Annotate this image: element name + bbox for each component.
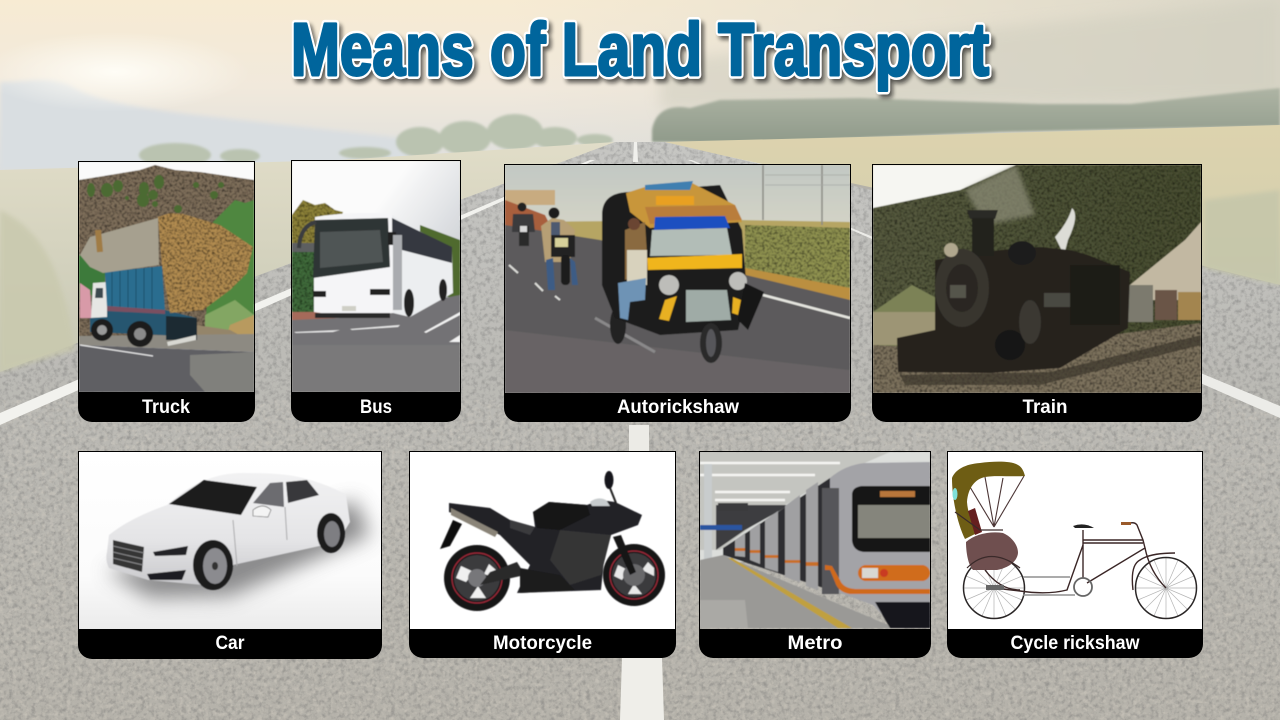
card outline: [410, 452, 676, 630]
label bar: Train: [872, 393, 1202, 422]
panel: truck: [78, 162, 255, 422]
label bar: Car: [78, 629, 382, 659]
label bar: Truck: Truck: [142, 397, 190, 418]
photo: white coach bus: [292, 161, 460, 392]
title: Means of Land Transport: [291, 8, 989, 91]
label bar: Car: Car: [216, 633, 245, 654]
label bar: Train: Train: [1022, 397, 1068, 418]
panel: car: [78, 452, 382, 659]
card outline: [78, 452, 382, 630]
title: Means of Land Transport: [294, 12, 992, 95]
photo: steam locomotive: [873, 165, 1201, 393]
sub-icon: motorcyclists: [512, 202, 578, 290]
label bar: Autorickshaw: [504, 393, 851, 422]
label bar: Metro: [699, 629, 931, 658]
label bar: Metro: Metro: [788, 633, 842, 654]
card outline: [872, 164, 1202, 394]
photo: truck loaded with hay: [79, 162, 254, 392]
panel: bus: [291, 160, 461, 422]
label bar: Motorcycle: Motorcycle: [493, 633, 592, 654]
title: Means of Land Transport: [291, 8, 989, 91]
label bar: Motorcycle: [409, 629, 676, 658]
photo: metro train at platform: [700, 452, 930, 628]
panel: metro: [699, 452, 931, 658]
photo: white sedan: [79, 452, 381, 629]
panel: motorcycle: [409, 452, 676, 658]
photo: black sports motorcycle: [410, 452, 675, 629]
photo: decorated autorickshaw on highway: [505, 165, 850, 393]
card outline: [504, 164, 850, 394]
card outline: [948, 452, 1202, 630]
label bar: Cycle rickshaw: Cycle rickshaw: [1010, 633, 1140, 654]
illustration: cycle rickshaw: [948, 452, 1202, 629]
panel: cycle rickshaw: [947, 452, 1203, 658]
label bar: Truck: [78, 392, 255, 422]
card outline: [78, 162, 254, 392]
card outline: [700, 452, 930, 630]
panel: autorickshaw: [504, 164, 851, 422]
label bar: Bus: Bus: [360, 397, 392, 418]
panel: train: [872, 164, 1202, 422]
label bar: Cycle rickshaw: [947, 629, 1203, 658]
label bar: Autorickshaw: Autorickshaw: [617, 397, 739, 418]
card outline: [292, 160, 460, 392]
sub-icon: wagons: [1120, 285, 1201, 322]
label bar: Bus: [291, 392, 461, 422]
